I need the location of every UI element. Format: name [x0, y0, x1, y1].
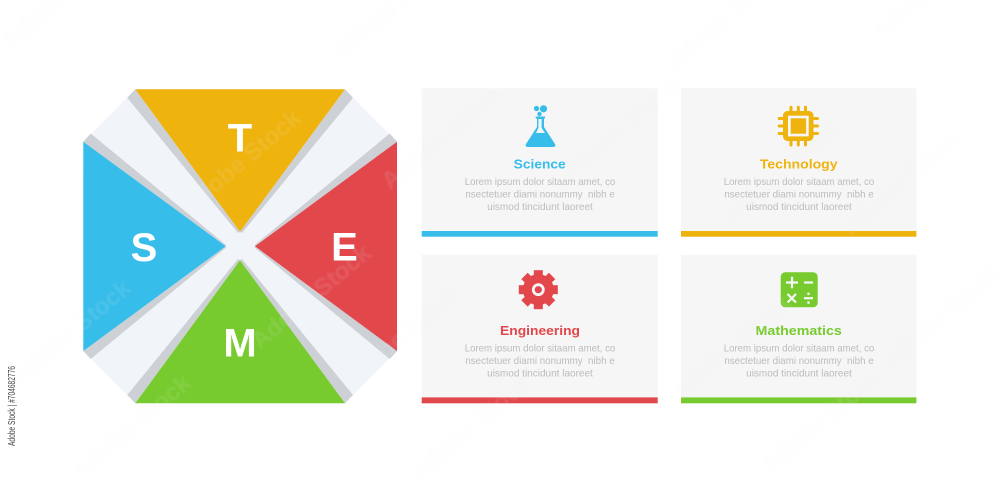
segment: E engineering: E — [331, 226, 358, 270]
panel: Technology card — [681, 88, 916, 237]
segment: M mathematics — [135, 260, 345, 403]
segment: T technology — [135, 89, 345, 232]
stock watermark overlay: Adobe Stock — [337, 279, 467, 395]
panel: Science card — [422, 88, 658, 237]
icon: gear — [519, 270, 558, 309]
text block: Engineering description: nsectetuer diami nonummy nibh e — [465, 355, 615, 367]
stock watermark overlay: Adobe Stock — [7, 274, 137, 390]
text block: Science description: Lorem ipsum dolor sitaam amet, co — [465, 176, 615, 188]
icon: flask — [526, 105, 555, 147]
text block: Technology description: Lorem ipsum dolor sitaam amet, co — [724, 176, 874, 188]
text block: Science description: uismod tincidunt laoreet — [487, 201, 593, 213]
heading: Engineering: Engineering — [500, 323, 580, 338]
panel: Mathematics card — [681, 255, 916, 403]
segment: S science — [83, 142, 226, 351]
panel: Engineering card — [422, 255, 658, 403]
stock watermark overlay: Adobe Stock — [757, 364, 887, 480]
text block: Engineering description — [465, 343, 615, 379]
icon: microchip — [779, 107, 818, 145]
stock id side label: Adobe Stock | #704682776 — [6, 366, 18, 446]
icon: calculator symbols — [781, 272, 818, 307]
text block: Technology description — [724, 176, 874, 213]
heading: Science: Science — [514, 156, 566, 171]
text block: Engineering description: Lorem ipsum dolor sitaam amet, co — [465, 343, 615, 355]
text block: Mathematics description: uismod tincidunt laoreet — [746, 367, 852, 379]
stock watermark overlay: Adobe Stock — [717, 114, 847, 230]
shadow strips beside segments — [83, 89, 397, 403]
heading: Technology: Technology — [760, 156, 838, 171]
octagon background — [83, 89, 397, 403]
text block: Mathematics description: nsectetuer diami nonummy nibh e — [724, 355, 874, 367]
text block: Science description — [465, 176, 615, 213]
stock watermark overlay: Adobe Stock — [177, 104, 307, 220]
text block: Engineering description: uismod tincidunt laoreet — [487, 367, 593, 379]
stock watermark overlay: Adobe Stock — [247, 239, 377, 355]
segment: S science: S — [131, 226, 157, 270]
segment: T technology: T — [228, 116, 252, 160]
text block: Technology description: nsectetuer diami nonummy nibh e — [724, 188, 874, 200]
segment: M mathematics: M — [223, 322, 257, 366]
stock watermark overlay: Adobe Stock — [377, 79, 507, 195]
stock watermark overlay: Adobe Stock — [667, 289, 797, 405]
stock watermark overlay: Adobe Stock — [837, 124, 967, 240]
text block: Mathematics description: Lorem ipsum dolor sitaam amet, co — [724, 343, 874, 355]
text block: Mathematics description — [724, 343, 874, 379]
text block: Science description: nsectetuer diami nonummy nibh e — [465, 188, 615, 200]
segment: E engineering — [255, 142, 397, 351]
heading: Mathematics: Mathematics — [756, 323, 842, 338]
text block: Technology description: uismod tincidunt laoreet — [746, 201, 852, 213]
panel: STEM octagon diagram — [83, 89, 397, 403]
stock watermark overlay: Adobe Stock — [557, 69, 687, 185]
